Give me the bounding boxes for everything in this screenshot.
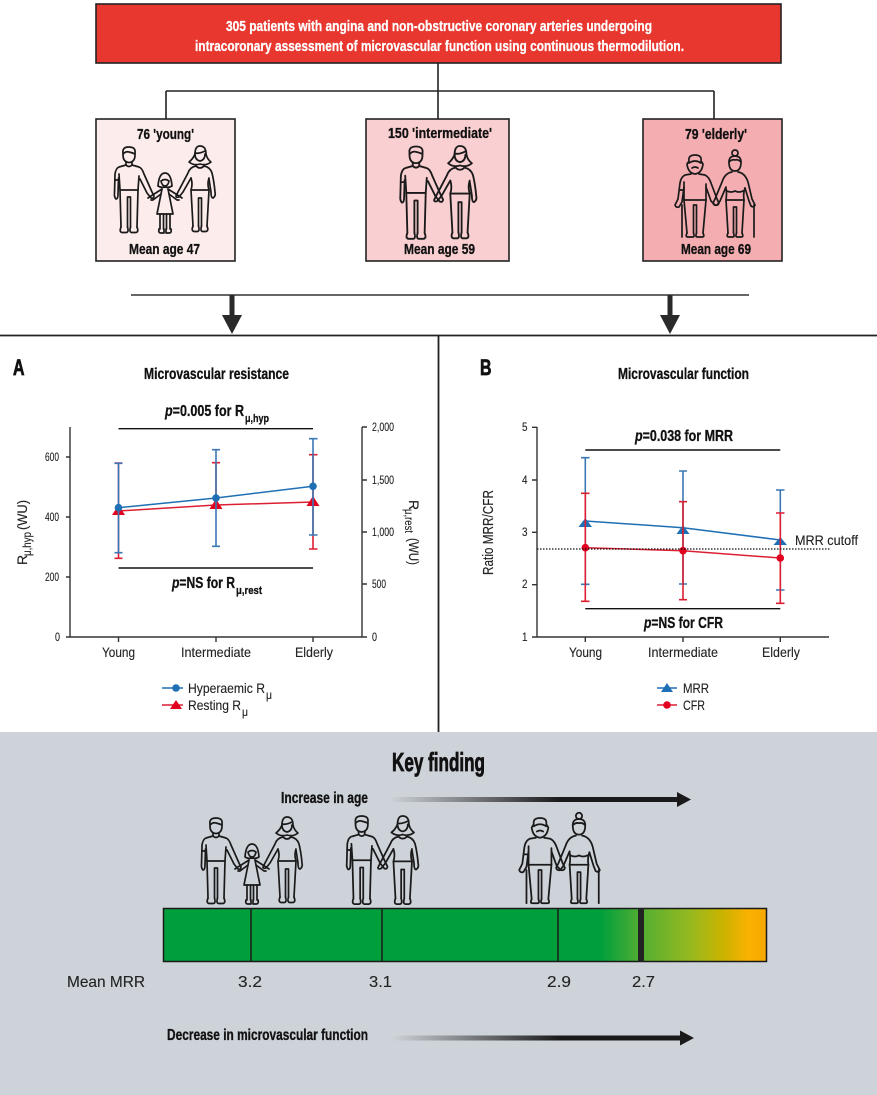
chart: resistance by age group: 0	[372, 630, 377, 644]
y axis title left: (WU)	[14, 500, 30, 530]
y axis title right	[402, 500, 422, 565]
legend A: μ	[242, 705, 248, 719]
MRR gradient bar	[164, 908, 766, 962]
icon: intermediate couple	[400, 146, 476, 239]
panel: young group: Mean age 47	[129, 241, 200, 258]
p value bottom: p=NS for CFR	[643, 615, 723, 632]
panel: elderly group: 79 'elderly'	[685, 126, 747, 143]
p value top: p=0.005 for R	[164, 403, 244, 420]
y axis title right: (WU)	[406, 538, 422, 565]
MRR cutoff line: MRR cutoff	[795, 532, 858, 548]
MRR values	[238, 974, 655, 991]
p value bottom: p=NS for R	[171, 575, 235, 592]
chart: resistance by age group: 400	[45, 510, 59, 524]
y axis title left: μ,hyp	[20, 532, 34, 556]
chart: resistance by age group: 0	[55, 630, 60, 644]
chart: MRR and CFR by age group	[480, 420, 858, 660]
icon: elderly couple	[519, 813, 600, 903]
chart: MRR and CFR by age group: 1	[522, 630, 528, 644]
panel: intermediate group	[366, 119, 509, 261]
p value top: μ,hyp	[245, 413, 269, 425]
chart: resistance by age group: 2,000	[372, 420, 394, 434]
label: increase in age: Increase in age	[281, 790, 368, 807]
label: mean MRR: Mean MRR	[67, 974, 145, 991]
legend A: Hyperaemic R	[188, 680, 265, 696]
header box: study population: 305 patients with angina and non-obstructive coronary arteries undergoing	[226, 18, 652, 35]
MRR values: 3.2	[238, 974, 262, 991]
icon: young family	[114, 146, 215, 233]
connector lines from header to groups	[166, 63, 714, 119]
chart: MRR and CFR by age group: 4	[522, 473, 528, 487]
chart: resistance by age group: Elderly	[295, 644, 333, 660]
legend A	[162, 680, 272, 719]
hyperaemic series	[114, 439, 318, 553]
chart: MRR and CFR by age group: Elderly	[762, 644, 800, 660]
panel label B: B	[480, 355, 492, 380]
chart: resistance by age group: Intermediate	[181, 644, 251, 660]
panel: elderly group	[643, 119, 782, 261]
panel: young group: 76 'young'	[137, 126, 194, 143]
chart: resistance by age group: 1,000	[372, 525, 394, 539]
y axis title: Ratio MRR/CFR	[480, 490, 497, 575]
icon: young family	[201, 817, 302, 904]
legend B	[657, 680, 709, 713]
chart: MRR and CFR by age group: 2	[522, 577, 528, 591]
legend A: μ	[266, 688, 272, 702]
y axis title right: μ,rest	[402, 509, 416, 534]
MRR series	[578, 458, 787, 590]
heading: microvascular resistance: Microvascular resistance	[144, 366, 289, 383]
heading: microvascular function: Microvascular function	[618, 366, 749, 383]
chart: resistance by age group: 200	[45, 570, 59, 584]
chart: MRR and CFR by age group: Young	[569, 644, 602, 660]
resting series	[112, 455, 320, 558]
panel: elderly group: Mean age 69	[681, 241, 751, 258]
chart: resistance by age group	[14, 403, 422, 660]
chart: resistance by age group: 1,500	[372, 473, 394, 487]
panel: B microvascular function	[480, 355, 858, 713]
chart: MRR and CFR by age group: Intermediate	[648, 644, 718, 660]
panel: A microvascular resistance	[13, 355, 422, 719]
p value bottom: μ,rest	[236, 585, 262, 597]
label: decrease in microvascular function: Decrease in microvascular function	[167, 1027, 368, 1044]
chart: MRR and CFR by age group: 3	[522, 525, 528, 539]
CFR series	[581, 493, 784, 603]
header box: study population: intracoronary assessment of microvascular function using continuous thermodilution.	[195, 38, 684, 55]
arrow: decrease in microvascular function	[392, 1030, 694, 1046]
icon: elderly couple	[675, 150, 755, 237]
panel label A: A	[13, 355, 25, 380]
branching arrows to panels	[131, 295, 749, 334]
chart: MRR and CFR by age group: 5	[522, 420, 528, 434]
panel: young group	[96, 119, 235, 261]
panel: intermediate group: 150 'intermediate'	[388, 125, 492, 142]
legend B: MRR	[683, 680, 709, 696]
panel: key finding	[0, 732, 877, 1095]
panel: intermediate group: Mean age 59	[404, 241, 475, 258]
chart: resistance by age group: Young	[102, 644, 135, 660]
p value bottom	[118, 568, 313, 597]
legend B: CFR	[683, 697, 705, 713]
y axis title left	[14, 500, 34, 565]
chart: resistance by age group: 500	[372, 577, 386, 591]
y axis title left: R	[14, 555, 30, 565]
p value top	[118, 403, 313, 429]
MRR values: 2.9	[547, 974, 571, 991]
MRR values: 2.7	[632, 974, 655, 991]
icon: intermediate couple	[347, 816, 418, 904]
chart: resistance by age group: 600	[45, 450, 59, 464]
p value top: p=0.038 for MRR	[634, 428, 733, 445]
panel frame lines	[0, 335, 877, 732]
arrow: increase in age	[390, 792, 691, 807]
legend A: Resting R	[188, 697, 241, 713]
MRR values: 3.1	[369, 974, 392, 991]
y axis title right: R	[406, 500, 422, 510]
heading: key finding: Key finding	[392, 747, 485, 777]
header box: study population	[96, 4, 781, 63]
